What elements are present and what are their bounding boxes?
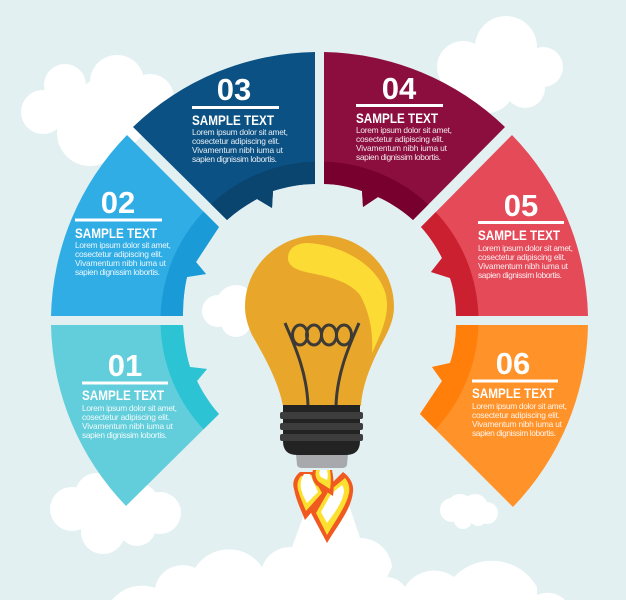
- heading 02: SAMPLE TEXT: [75, 225, 157, 241]
- cloud: behind bulb: [202, 285, 256, 337]
- body text 01: Vivamentum nibh iuma ut: [82, 421, 174, 431]
- body text 06: sapien dignissim lobortis.: [472, 428, 556, 438]
- number 05: 05: [504, 188, 538, 223]
- bulb highlight: [288, 243, 387, 353]
- base ribs: [280, 412, 363, 441]
- rocket smoke clouds: [112, 480, 565, 600]
- number 04: 04: [382, 71, 417, 106]
- body text 01: Lorem ipsum dolor sit amet,: [82, 403, 177, 413]
- screw base: [283, 405, 360, 455]
- panel: 02: [51, 135, 219, 316]
- heading 01: SAMPLE TEXT: [82, 387, 164, 403]
- number 01: 01: [108, 348, 142, 383]
- body text 01: sapien dignissim lobortis.: [82, 430, 167, 440]
- panel: 05: [421, 135, 588, 316]
- number 06: 06: [496, 346, 530, 381]
- bulb glass: [245, 235, 394, 406]
- heading 03: SAMPLE TEXT: [192, 112, 274, 128]
- body text 04: Lorem ipsum dolor sit amet,: [356, 125, 452, 135]
- body text 02: Vivamentum nibh iuma ut: [75, 258, 167, 268]
- gray socket: [296, 454, 348, 468]
- body text 02: Lorem ipsum dolor sit amet,: [75, 240, 171, 250]
- body text 05: Lorem ipsum dolor sit amet,: [478, 243, 573, 253]
- body text 02: cosectetur adipiscing elit.: [75, 249, 163, 259]
- body text 06: cosectetur adipiscing elit.: [472, 410, 560, 420]
- number 03: 03: [217, 72, 251, 107]
- body text 03: sapien dignissim lobortis.: [192, 154, 277, 164]
- icon: rocket flame: [293, 470, 353, 543]
- heading 04: SAMPLE TEXT: [356, 110, 438, 126]
- icon: light bulb: [245, 235, 394, 468]
- body text 03: Lorem ipsum dolor sit amet,: [192, 127, 288, 137]
- body text 05: sapien dignissim lobortis.: [478, 270, 562, 280]
- panel: 03: [133, 52, 315, 220]
- cloud: bottom left: [50, 473, 181, 554]
- body text 05: cosectetur adipiscing elit.: [478, 252, 566, 262]
- cloud: top right: [437, 16, 563, 113]
- cloud: top left: [21, 55, 174, 166]
- body text 02: sapien dignissim lobortis.: [75, 267, 160, 277]
- heading 05: SAMPLE TEXT: [478, 227, 560, 243]
- body text 06: Lorem ipsum dolor sit amet,: [472, 401, 567, 411]
- panel: 01: [51, 325, 219, 506]
- number 02: 02: [101, 185, 135, 220]
- body text 03: Vivamentum nibh iuma ut: [192, 145, 284, 155]
- body text 01: cosectetur adipiscing elit.: [82, 412, 170, 422]
- heading 06: SAMPLE TEXT: [472, 385, 554, 401]
- body text 04: cosectetur adipiscing elit.: [356, 134, 444, 144]
- body text 04: sapien dignissim lobortis.: [356, 152, 441, 162]
- panel: 04: [324, 52, 505, 220]
- body text 04: Vivamentum nibh iuma ut: [356, 143, 448, 153]
- body text 03: cosectetur adipiscing elit.: [192, 136, 280, 146]
- body text 05: Vivamentum nibh iuma ut: [478, 261, 569, 271]
- cloud: bottom right: [440, 494, 498, 529]
- panel: 06: [420, 325, 588, 507]
- filament: [285, 323, 359, 406]
- body text 06: Vivamentum nibh iuma ut: [472, 419, 563, 429]
